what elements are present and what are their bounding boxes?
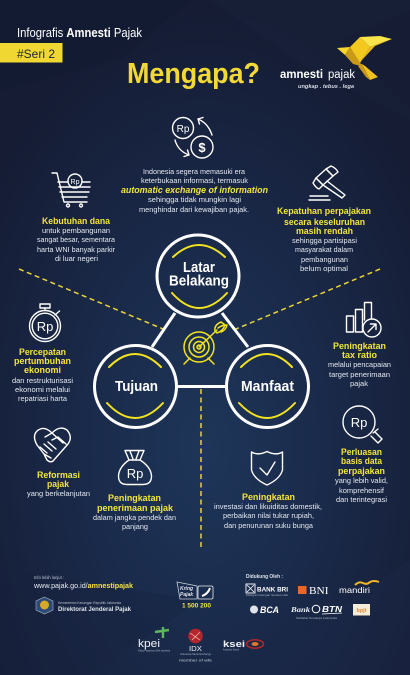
text block: percepatan pertumbuhan ekonomi: repatriasi harta (18, 394, 68, 403)
title: Mengapa? (127, 58, 260, 90)
text block: latar belakang intro: sehingga tidak mungkin lagi (148, 195, 241, 204)
text block: kepatuhan perpajakan (277, 206, 371, 273)
text block: percepatan pertumbuhan ekonomi: ekonomi (24, 365, 61, 375)
footer: ksei logo: ksei (223, 639, 245, 650)
footer: IDX logo: Indonesia Stock Exchange (180, 652, 211, 656)
footer: Kring Pajak: 1 500 200 (182, 602, 211, 610)
icon: money bag: Rp (127, 466, 143, 481)
text block: perluasan basis data: Perluasan (341, 447, 382, 457)
logo: Bank BTN (290, 605, 342, 620)
icon: target with arrow (184, 322, 227, 364)
text block: kepatuhan perpajakan: pembangunan (301, 255, 348, 264)
icon: currency exchange (172, 118, 213, 158)
logo: bpjt: bpjt (356, 608, 367, 614)
footer: kpei logo (138, 627, 170, 652)
text block: perluasan basis data: basis data (341, 456, 383, 466)
text block: reformasi pajak (27, 470, 90, 498)
icon: origami bird (337, 36, 392, 80)
text block: peningkatan tax ratio: pajak (350, 379, 368, 388)
text block: kebutuhan dana: untuk pembangunan (42, 226, 110, 235)
dashed connector: bottom (200, 389, 202, 550)
text block: kepatuhan perpajakan: masih rendah (296, 226, 353, 236)
text block: percepatan pertumbuhan ekonomi (12, 347, 73, 403)
logo: amnesti pajak: pajak (328, 69, 355, 81)
icon: magnifier: Rp (351, 415, 367, 430)
text block: kebutuhan dana: sangat besar, sementara (37, 235, 116, 244)
logo: Bank BRI: Melayani Dengan Setulus Hati (246, 593, 288, 597)
circle: Manfaat (226, 346, 308, 428)
text block: latar belakang intro: automatic exchange of information (121, 185, 268, 195)
logo: amnesti pajak (280, 36, 392, 90)
text block: peningkatan investasi (214, 492, 322, 530)
footer: ksei logo: Kustodian Sentral (223, 648, 239, 652)
footer: Kring Pajak: Kring (180, 586, 193, 592)
circle: Manfaat: Manfaat (241, 378, 294, 395)
circle: Latar Belakang: Belakang (169, 272, 229, 290)
icon: handshake heart (34, 428, 70, 462)
text block: kebutuhan dana: harta WNI banyak parkir (37, 245, 116, 254)
text block: kepatuhan perpajakan: sehingga partisipasi (292, 236, 357, 245)
badge: Seri 2: #Seri 2 (17, 47, 55, 61)
text block: kebutuhan dana: Kebutuhan dana (42, 216, 111, 226)
icon: stopwatch (30, 304, 60, 342)
logo: BNI: BNI (309, 586, 328, 597)
icon: money bag (118, 450, 152, 484)
icon: magnifier (343, 406, 382, 443)
text block: kepatuhan perpajakan: Kepatuhan perpajakan (277, 206, 371, 216)
logo: amnesti pajak: ungkap . tebus . lega (298, 84, 354, 90)
footer: sponsors: Didukung Oleh : (246, 574, 283, 580)
logo: Bank BTN: Bank (290, 606, 311, 614)
footer: IDX logo: IDX (189, 644, 202, 653)
text block: perluasan basis data: perpajakan (338, 466, 385, 476)
text block: perluasan basis data (335, 447, 388, 504)
logo: mandiri: mandiri (339, 585, 370, 595)
text block: peningkatan penerimaan pajak: penerimaan pajak (97, 503, 174, 513)
text block: kebutuhan dana (37, 216, 116, 263)
icon: currency exchange: Rp (177, 124, 190, 135)
icon: bar chart with arrow (346, 302, 381, 337)
footer: ksei logo (223, 639, 264, 652)
footer: Kring Pajak: Pajak (180, 592, 193, 598)
header label: Infografis Amnesti Pajak: Infografis Amnesti Pajak (17, 26, 143, 40)
logo: Bank BTN: BTN (322, 605, 342, 614)
text block: perluasan basis data: dan terintegrasi (336, 495, 387, 504)
text block: latar belakang intro: keterbukaan informasi, termasuk (141, 176, 248, 185)
footer: sponsors (246, 574, 379, 620)
text block: reformasi pajak: yang berkelanjutan (27, 489, 90, 498)
text block: perluasan basis data: komprehensif (339, 486, 385, 495)
text block: peningkatan penerimaan pajak: Peningkatan (108, 493, 161, 503)
circle: Latar Belakang (157, 235, 239, 317)
text block: percepatan pertumbuhan ekonomi: Percepatan (19, 347, 66, 357)
footer: Direktorat Jenderal Pajak logo: Kementerian Keuangan Republik Indonesia (58, 601, 121, 605)
icon: shopping cart (52, 173, 90, 207)
text block: kepatuhan perpajakan: secara keseluruhan (284, 217, 365, 227)
logo: amnesti pajak: amnesti (280, 69, 323, 81)
text block: peningkatan penerimaan pajak: panjang (122, 522, 148, 531)
footer: Direktorat Jenderal Pajak logo: Direktorat Jenderal Pajak (58, 606, 131, 613)
footer: Kring Pajak (177, 582, 213, 610)
footer: IDX logo (179, 629, 212, 662)
text block: peningkatan tax ratio: target penerimaan (329, 370, 390, 379)
footer: website info: Info lebih lanjut : (34, 575, 64, 580)
text block: kepatuhan perpajakan: masyarakat dalam (295, 245, 353, 254)
dashed connector: left (19, 269, 163, 329)
text block: peningkatan tax ratio (328, 341, 391, 388)
text block: percepatan pertumbuhan ekonomi: pertumbuhan (14, 356, 71, 366)
logo: Bank BTN: Sahabat Keluarga Indonesia (296, 616, 338, 620)
text block: kepatuhan perpajakan: belum optimal (300, 264, 348, 273)
icon: shopping cart: Rp (71, 179, 80, 186)
footer: Direktorat Jenderal Pajak logo (36, 597, 131, 614)
footer: kpei logo: Kliring Penjaminan Efek Indonesia (138, 648, 170, 652)
text block: latar belakang intro: Indonesia segera memasuki era (143, 167, 246, 176)
icon: gavel (309, 166, 345, 200)
text block: peningkatan penerimaan pajak (93, 493, 176, 531)
footer: IDX logo: member of wfe (179, 658, 212, 662)
text block: peningkatan tax ratio: tax ratio (342, 350, 377, 360)
icon: stopwatch: Rp (37, 319, 53, 334)
circle: Tujuan (94, 346, 176, 428)
triangle connectors (152, 313, 248, 386)
footer: website info: www.pajak.go.id/amnestipajak (33, 581, 134, 590)
logo: BCA: BCA (260, 605, 279, 615)
text block: peningkatan investasi: dan penurunan suku bunga (224, 521, 314, 530)
circle: Latar Belakang: Latar (183, 259, 215, 276)
text block: percepatan pertumbuhan ekonomi: ekonomi melalui (15, 385, 70, 394)
text block: perluasan basis data: yang lebih valid, (335, 476, 388, 485)
text block: peningkatan investasi: Peningkatan (242, 492, 295, 502)
text block: latar belakang intro: menghindar dari kewajiban pajak. (139, 205, 249, 214)
text block: peningkatan tax ratio: Peningkatan (333, 341, 386, 351)
text block: peningkatan investasi: investasi dan likuiditas domestik, (214, 502, 322, 511)
text block: peningkatan investasi: perbaikan nilai tukar rupiah, (223, 511, 314, 520)
footer: website info (33, 575, 134, 590)
text block: peningkatan tax ratio: melalui pencapaian (328, 360, 391, 369)
text block: latar belakang intro (121, 167, 268, 214)
badge: Seri 2 (0, 43, 62, 62)
text block: reformasi pajak: Reformasi (37, 470, 80, 480)
logo: Bank BRI (246, 584, 288, 597)
text block: reformasi pajak: pajak (47, 479, 70, 489)
text block: percepatan pertumbuhan ekonomi: dan restrukturisasi (12, 376, 73, 385)
text block: peningkatan penerimaan pajak: dalam jangka pendek dan (93, 513, 176, 522)
footer: kpei logo: kpei (138, 638, 160, 650)
circle: Tujuan: Tujuan (115, 378, 158, 395)
logo: Bank BRI: BANK BRI (257, 586, 288, 594)
icon: currency exchange: $ (198, 140, 206, 155)
dashed connector: right (236, 269, 380, 329)
icon: shield check (252, 452, 282, 485)
text block: kebutuhan dana: di luar negeri (55, 254, 98, 263)
